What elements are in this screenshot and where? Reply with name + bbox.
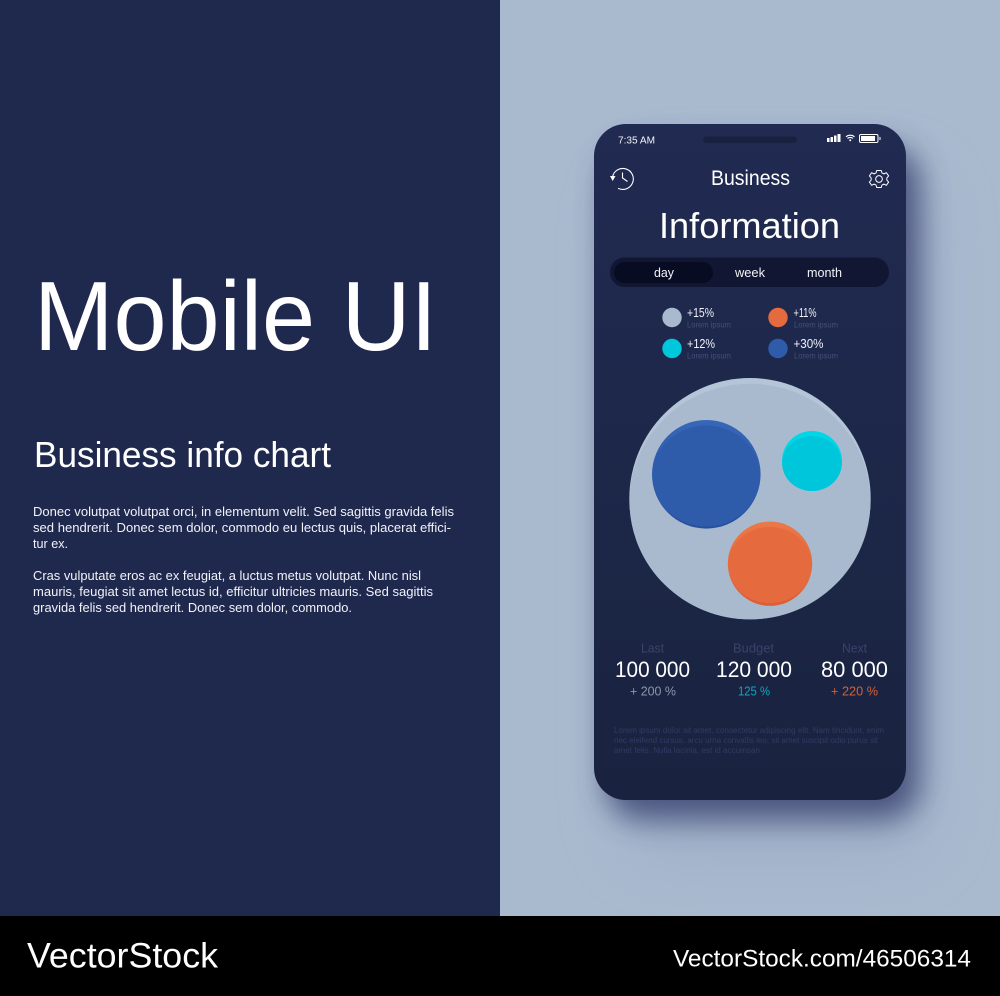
paragraph 1: sed hendrerit. Donec sem dolor, commodo eu lectus quis, placerat effici-	[33, 520, 451, 535]
paragraph 1: tur ex.	[33, 536, 68, 551]
status icons	[827, 134, 880, 142]
stat: last: Last	[641, 640, 664, 656]
subtitle: Business info chart	[34, 434, 331, 475]
footnote text: nec eleifend cursus, arcu urna convallis leo, sit amet suscipit odio purus sit	[614, 736, 879, 745]
screen heading: Business	[711, 167, 790, 190]
footnote text: Lorem ipsum dolor sit amet, consectetur adipiscing elit. Nam tincidunt, enim	[614, 726, 884, 735]
stat: budget	[716, 640, 792, 698]
stat: next: Next	[842, 640, 867, 656]
stat: next	[821, 640, 888, 698]
paragraph 2	[33, 568, 433, 615]
legend: Lorem ipsum	[687, 352, 731, 360]
footnote text: amet felis. Nulla lacinia, est id accumsan	[614, 746, 760, 755]
legend: Lorem ipsum	[794, 352, 838, 360]
stat: next: + 220 %	[831, 684, 878, 698]
bubble chart	[629, 378, 871, 619]
footer logo: VectorStock	[27, 936, 219, 976]
icon: settings gear	[869, 170, 889, 188]
legend: +15%	[687, 306, 714, 320]
footer bar	[0, 916, 1000, 996]
legend: Lorem ipsum	[794, 320, 838, 330]
stat: next: 80 000	[821, 657, 888, 682]
phone shadow	[606, 146, 930, 855]
title: Mobile UI	[34, 261, 437, 371]
chart disc	[629, 378, 871, 619]
bubble: orange	[728, 522, 812, 606]
legend: +12%	[687, 337, 715, 351]
stat: last: 100 000	[615, 657, 690, 682]
paragraph 2: gravida felis sed hendrerit. Donec sem dolor, commodo.	[33, 600, 352, 615]
left panel background	[0, 0, 500, 916]
notch speaker	[703, 136, 797, 143]
stat: budget: 120 000	[716, 657, 792, 682]
period toggle	[610, 258, 889, 287]
phone body	[594, 124, 906, 800]
footer url: VectorStock.com/46506314	[673, 946, 971, 972]
status bar time: 7:35 AM	[618, 136, 655, 146]
paragraph 1: Donec volutpat volutpat orci, in elementum velit. Sed sagittis gravida felis	[33, 504, 454, 519]
period toggle: week	[734, 265, 765, 280]
stat: last	[615, 640, 690, 698]
paragraph 2: Cras vulputate eros ac ex feugiat, a luctus metus volutpat. Nunc nisl	[33, 568, 421, 583]
legend: +11%	[794, 306, 816, 320]
period toggle: day	[654, 265, 674, 280]
legend: Lorem ipsum	[687, 320, 731, 330]
screen title: Information	[659, 205, 840, 246]
icon: history clock	[610, 168, 633, 189]
footnote text	[614, 726, 884, 755]
legend	[662, 306, 838, 360]
period toggle: month	[807, 265, 842, 280]
stat: last: + 200 %	[630, 684, 676, 698]
stat: budget: 125 %	[738, 684, 770, 698]
phone mockup	[594, 124, 906, 800]
bubble: cyan	[782, 431, 842, 491]
right panel background	[500, 0, 1000, 916]
legend: +30%	[794, 337, 824, 351]
paragraph 1	[33, 504, 454, 551]
bubble: blue	[652, 420, 761, 529]
paragraph 2: mauris, feugiat sit amet lectus id, efficitur ultricies mauris. Sed sagittis	[33, 584, 433, 599]
stat: budget: Budget	[733, 640, 774, 656]
